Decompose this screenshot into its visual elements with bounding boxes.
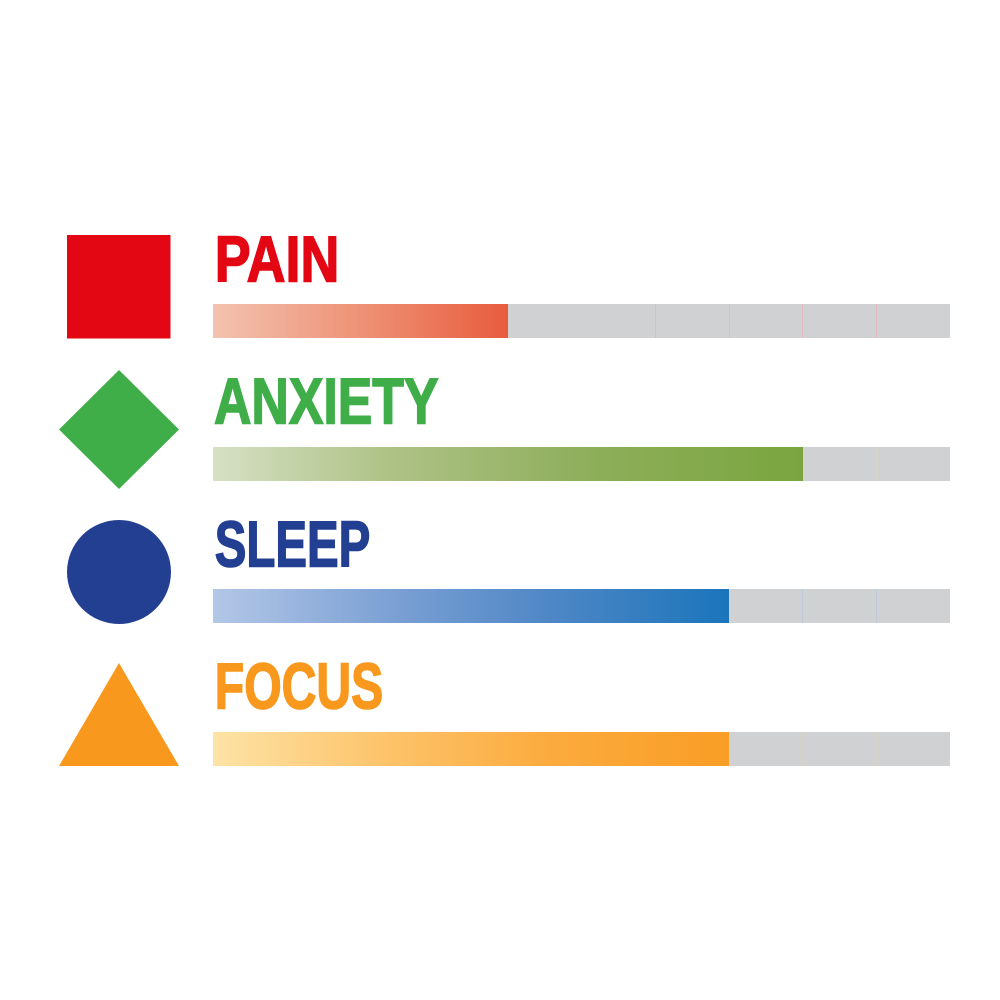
bar: sleep rating <box>213 589 950 623</box>
heading: SLEEP: SLEEP <box>215 508 370 580</box>
icon: red square <box>67 235 170 338</box>
icon: green diamond <box>59 370 179 489</box>
heading: FOCUS: FOCUS <box>215 650 383 722</box>
icon: blue circle <box>67 520 171 624</box>
bar: focus rating <box>213 732 950 766</box>
heading: ANXIETY: ANXIETY <box>214 364 438 438</box>
bar: anxiety rating <box>213 447 950 481</box>
heading: PAIN: PAIN <box>215 222 339 296</box>
icon: orange triangle <box>59 663 179 766</box>
bar: pain rating <box>213 304 950 338</box>
